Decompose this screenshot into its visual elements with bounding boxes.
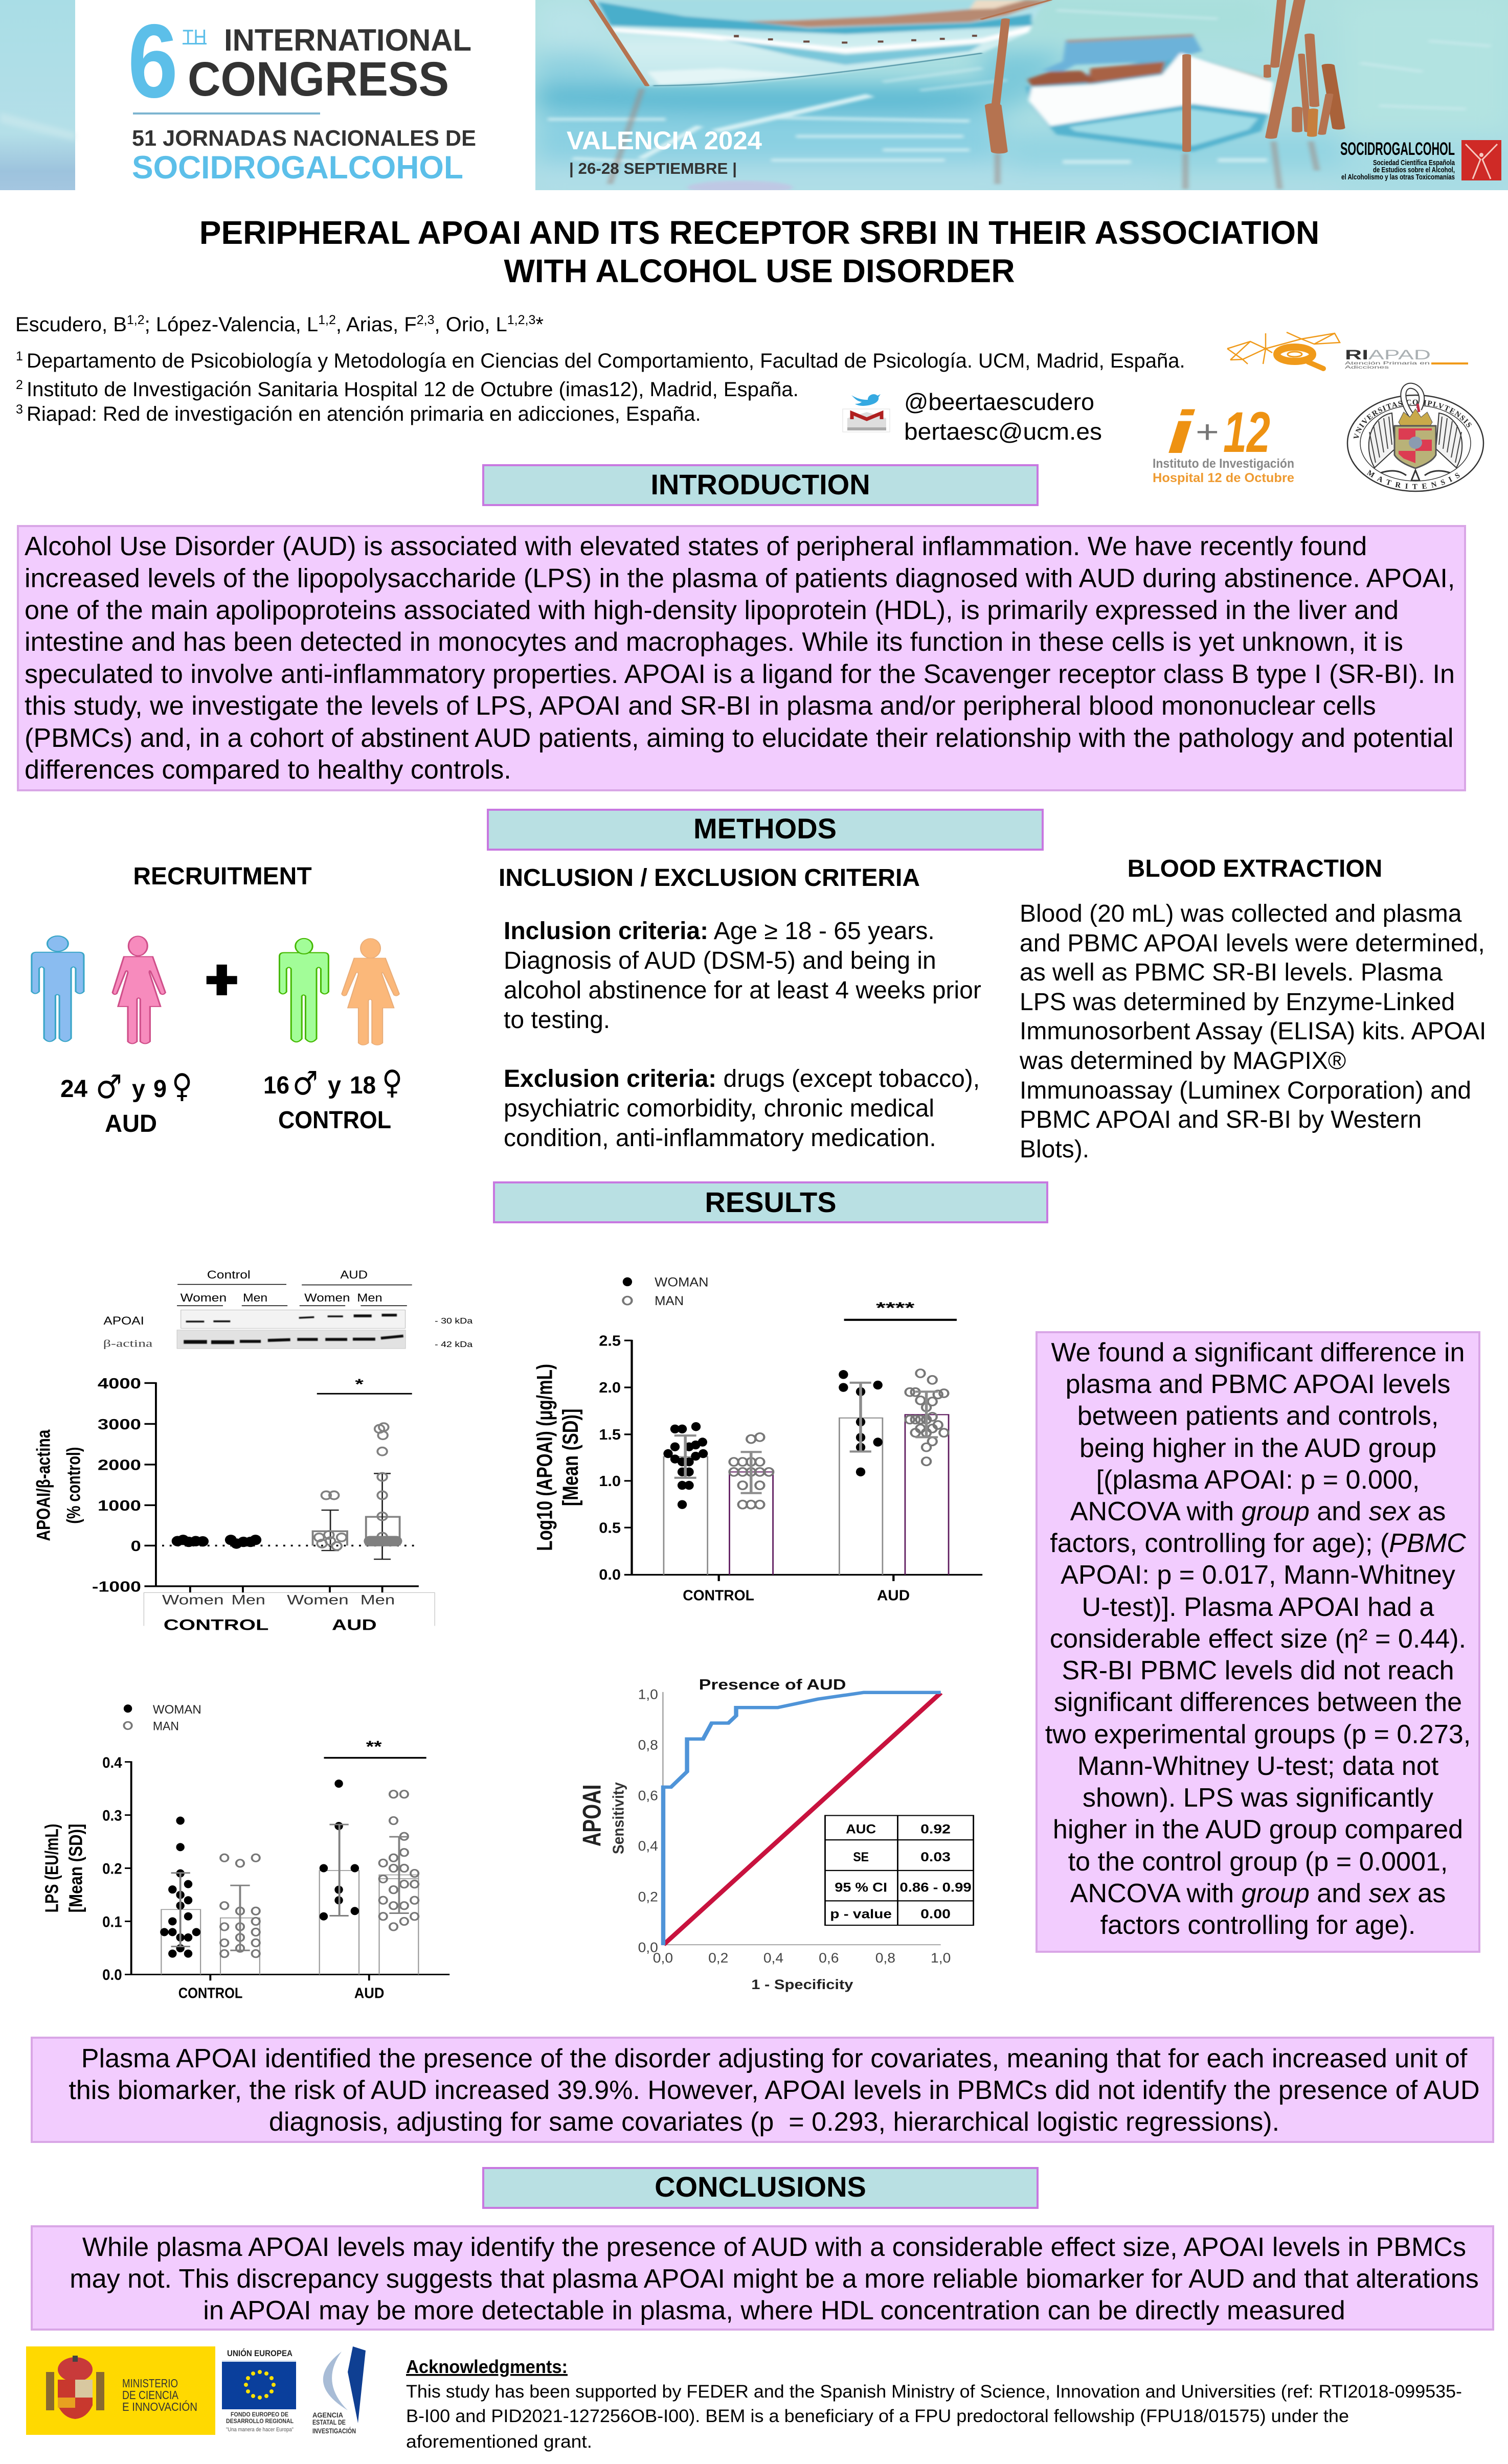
axes: 0,8 xyxy=(638,1737,658,1753)
panel: conclusions text: in APOAI may be more detectable in plasma, where HDL concentration can be directly measured xyxy=(203,2296,1345,2325)
logo: European Union: "Una manera de hacer Europa" xyxy=(226,2427,294,2433)
society logo xyxy=(1340,139,1501,181)
western blot bands: β-actina xyxy=(103,1338,153,1349)
y axis: (% control) xyxy=(63,1447,84,1524)
logo: European Union xyxy=(222,2348,296,2433)
authors: 1,2 xyxy=(127,313,145,327)
axes: 0,0 xyxy=(653,1950,673,1966)
axes: LPS (EU/mL) xyxy=(41,1824,62,1912)
panel: introduction text: increased levels of the lipopolysaccharide (LPS) in the plasma of patients diagnosed with AUD during abstinence. APOAI, xyxy=(25,563,1455,593)
contact block: @beertaescudero xyxy=(904,389,1094,415)
axes: 0,2 xyxy=(638,1889,658,1905)
exclusion text: psychiatric comorbidity, chronic medical xyxy=(504,1095,934,1122)
axes: [Mean (SD)] xyxy=(559,1409,583,1506)
legend xyxy=(623,1275,708,1308)
authors: 1,2,3 xyxy=(507,313,535,327)
ROC curve line xyxy=(663,1693,941,1945)
group labels: Men xyxy=(231,1592,265,1608)
AUD counts xyxy=(60,1067,192,1137)
control counts: 16 xyxy=(263,1072,289,1099)
panel: results text: ANCOVA with group and sex as xyxy=(1070,1497,1446,1526)
acknowledgments: aforementioned grant. xyxy=(406,2432,592,2452)
section heading: methods xyxy=(488,810,1043,850)
axes: 0,4 xyxy=(763,1950,783,1966)
affiliations: 1 xyxy=(16,349,23,363)
AUC statistics table: 95 % CI xyxy=(835,1881,887,1895)
axes: AUD xyxy=(877,1588,910,1604)
western blot bands: APOAI xyxy=(103,1314,144,1328)
water tones xyxy=(535,8,1492,177)
inclusion text: to testing. xyxy=(504,1007,610,1034)
blood extraction text: Blots). xyxy=(1020,1136,1089,1163)
authors: Escudero, B xyxy=(15,313,127,336)
blood extraction text: and PBMC APOAI levels were determined, xyxy=(1020,930,1485,957)
axes: 0.5 xyxy=(599,1520,621,1536)
contact block xyxy=(843,389,1102,445)
panel: results text: being higher in the AUD group xyxy=(1079,1433,1436,1463)
venue and date: VALENCIA 2024 xyxy=(567,126,762,155)
boat two xyxy=(1025,34,1273,152)
axes: APOAI xyxy=(577,1785,606,1846)
panel: results text: ANCOVA with group and sex as xyxy=(1070,1879,1446,1908)
axes: 0.0 xyxy=(102,1967,122,1983)
panel: results text xyxy=(1037,1332,1479,1952)
logo: i+12 xyxy=(1153,399,1294,485)
AUD counts: ♀ xyxy=(172,1067,192,1105)
y axis: APOAI/β-actina xyxy=(33,1429,54,1541)
AUD counts: 24 xyxy=(60,1076,87,1103)
data points xyxy=(663,1370,948,1509)
axes: 2.5 xyxy=(599,1333,621,1349)
logo: Spanish ministry xyxy=(26,2346,215,2435)
logo: RIAPAD: Atención Primaria en xyxy=(1345,361,1430,366)
affiliations: 3 xyxy=(16,402,23,417)
logo: RIAPAD: RI APAD xyxy=(1345,347,1431,362)
exclusion text xyxy=(504,1065,980,1152)
panel: logistic regression text xyxy=(32,2038,1493,2142)
blot column labels: Control xyxy=(207,1268,251,1282)
title: PERIPHERAL APOAI AND ITS RECEPTOR SRBI IN THEIR ASSOCIATION xyxy=(199,214,1319,251)
authors: 1,2 xyxy=(318,313,336,327)
venue and date: | 26-28 SEPTIEMBRE | xyxy=(569,159,737,177)
acknowledgments: This study has been supported by FEDER and the Spanish Ministry of Science, Innovation and Universities (ref: RTI2018-099535- xyxy=(406,2382,1462,2402)
icon: plus xyxy=(207,965,237,995)
icon: twitter xyxy=(851,394,881,406)
society logo: Sociedad Científica Española xyxy=(1373,158,1455,167)
logo: Spanish ministry: DE CIENCIA xyxy=(122,2388,179,2402)
acknowledgments xyxy=(406,2356,1462,2452)
legend: WOMAN xyxy=(655,1275,708,1290)
panel: results text: factors, controlling for age); (PBMC xyxy=(1050,1528,1466,1558)
western blot bands xyxy=(103,1310,473,1349)
control counts: ♀ xyxy=(382,1064,402,1102)
axes: 0.3 xyxy=(102,1808,122,1824)
AUD counts: y xyxy=(132,1076,145,1103)
left water strip xyxy=(0,0,75,190)
y axis xyxy=(33,1375,419,1595)
chart: ROC curve xyxy=(577,1677,974,1992)
painting of boats on water xyxy=(535,0,1508,194)
logo: state research agency: AGENCIA xyxy=(312,2411,343,2419)
blot column labels: Women xyxy=(181,1291,227,1305)
logo: Spanish ministry: E INNOVACIÓN xyxy=(122,2400,197,2413)
exclusion text: Exclusion criteria: drugs (except tobacco), xyxy=(504,1065,980,1092)
AUD counts: 9 xyxy=(153,1076,167,1103)
logo: RIAPAD xyxy=(1227,332,1468,370)
panel: results text: between patients and controls, xyxy=(1077,1401,1438,1431)
logo: European Union: FONDO EUROPEO DE xyxy=(231,2411,288,2418)
society logo: el Alcoholismo y las otras Toxicomanías xyxy=(1341,173,1455,181)
chart: western blot and APOAI/beta-actin in PBMC xyxy=(33,1268,473,1633)
section heading: conclusions xyxy=(483,2168,1038,2208)
group labels: Men xyxy=(361,1592,395,1608)
blood extraction text: Immunosorbent Assay (ELISA) kits. APOAI xyxy=(1020,1018,1486,1045)
logo: state research agency xyxy=(312,2346,366,2435)
axes: 0,8 xyxy=(875,1950,895,1966)
AUC statistics table: p - value xyxy=(830,1907,892,1922)
panel: results text: We found a significant difference in xyxy=(1051,1338,1465,1367)
plot marks xyxy=(162,1376,417,1559)
panel: introduction text: Alcohol Use Disorder (AUD) is associated with elevated states of peripheral inflammation. We have recently found xyxy=(25,532,1367,561)
bars xyxy=(161,1870,418,1974)
blot column labels: Men xyxy=(243,1291,267,1305)
logo: European Union: DESARROLLO REGIONAL xyxy=(226,2417,294,2425)
panel: results text: U-test)]. Plasma APOAI had a xyxy=(1082,1592,1434,1622)
panel: recruitment xyxy=(32,863,402,1137)
inclusion text: Diagnosis of AUD (DSM-5) and being in xyxy=(504,947,936,974)
AUC statistics table: SE xyxy=(853,1850,869,1864)
axes: 0,6 xyxy=(819,1950,839,1966)
acknowledgments: Acknowledgments: xyxy=(406,2356,568,2377)
heading: blood extraction: BLOOD EXTRACTION xyxy=(1128,855,1382,882)
panel: results text: [(plasma APOAI: p = 0.000, xyxy=(1096,1465,1420,1495)
axes: 1,0 xyxy=(638,1687,658,1702)
error bars and significance xyxy=(674,1299,957,1493)
y axis: 0 xyxy=(131,1538,141,1555)
panel: logistic regression text: Plasma APOAI identified the presence of the disorder adjusting for covariates, meaning that for each increased unit of xyxy=(81,2044,1468,2073)
legend: WOMAN xyxy=(153,1702,201,1717)
panel: inclusion and exclusion criteria xyxy=(499,864,981,1152)
legend xyxy=(124,1702,201,1733)
axes: Log10 (APOAI) (μg/mL) xyxy=(533,1364,557,1551)
panel: logistic regression text: this biomarker, the risk of AUD increased 39.9%. However, APOAI levels in PBMCs did not identify the presence of AUD xyxy=(69,2075,1480,2105)
panel: conclusions text: may not. This discrepancy suggests that plasma APOAI might be a more reliable biomarker for AUD and that alterations xyxy=(70,2264,1479,2294)
western blot bands: - 42 kDa xyxy=(435,1340,473,1349)
blot column labels: AUD xyxy=(340,1268,368,1282)
logo: RIAPAD: Adicciones xyxy=(1345,365,1389,370)
control counts: y xyxy=(328,1072,341,1099)
western blot bands: - 30 kDa xyxy=(435,1316,473,1326)
affiliations xyxy=(16,349,1185,425)
panel: conclusions text: While plasma APOAI levels may identify the presence of AUD with a considerable effect size, APOAI levels in PBMCs xyxy=(82,2232,1466,2262)
logo: university seal xyxy=(1347,382,1484,492)
logo: state research agency: ESTATAL DE xyxy=(312,2418,346,2426)
panel: introduction text xyxy=(18,526,1465,790)
panel: introduction text: (PBMCs) and, in a cohort of abstinent AUD patients, aiming to elucidate their relationship with the pathology and potential xyxy=(25,723,1453,753)
section heading: introduction: INTRODUCTION xyxy=(650,468,870,500)
logo: university seal: MATRITENSIS xyxy=(1366,470,1459,489)
panel: results text: APOAI: p = 0.017, Mann-Whitney xyxy=(1061,1560,1455,1590)
panel: results text: considerable effect size (η² = 0.44). xyxy=(1050,1624,1466,1654)
control counts: ♂ xyxy=(292,1065,318,1103)
axes: AUD xyxy=(354,1986,384,2002)
blood extraction text: was determined by MAGPIX® xyxy=(1019,1047,1346,1075)
panel: results text: plasma and PBMC APOAI levels xyxy=(1066,1370,1450,1399)
inclusion text: alcohol abstinence for at least 4 weeks prior xyxy=(504,977,981,1004)
affiliations: 2 xyxy=(16,378,23,392)
control counts xyxy=(263,1064,402,1134)
axes: 0.2 xyxy=(102,1861,122,1877)
panel: conclusions text xyxy=(32,2226,1493,2330)
oar reflections xyxy=(610,88,1317,189)
inclusion text xyxy=(504,918,981,1034)
error bars and significance: **** xyxy=(876,1299,914,1316)
blood extraction text: Immunoassay (Luminex Corporation) and xyxy=(1020,1077,1471,1104)
chart title: Presence of AUD xyxy=(699,1677,846,1693)
logo: Spanish ministry: MINISTERIO xyxy=(122,2377,178,2390)
AUC statistics table: 0.00 xyxy=(920,1907,951,1922)
icon: control man xyxy=(279,939,328,1042)
panel: results text: shown). LPS was significantly xyxy=(1083,1783,1433,1813)
AUC statistics table: 0.92 xyxy=(920,1822,951,1837)
heading: criteria: INCLUSION / EXCLUSION CRITERIA xyxy=(499,864,920,892)
logo: i+12: + xyxy=(1196,415,1219,450)
chart: plasma APOAI xyxy=(533,1275,982,1604)
axes xyxy=(41,1754,449,2002)
y axis: 2000 xyxy=(98,1456,141,1473)
panel: introduction text: differences compared to healthy controls. xyxy=(25,755,511,785)
panel: blood extraction xyxy=(1019,855,1486,1163)
panel: introduction text: this study, we investigate the levels of LPS, APOAI and SR-BI in plasma and/or peripheral blood mononuclear cells xyxy=(25,691,1376,721)
bars xyxy=(664,1414,949,1575)
logo: university seal: VNIVERSITAS COMPLVTENSIS xyxy=(1353,400,1472,439)
y axis: -1000 xyxy=(92,1578,141,1595)
blot column labels: Women xyxy=(304,1291,350,1305)
authors: ; López-Valencia, L xyxy=(145,313,318,336)
figures and groups xyxy=(32,936,402,1137)
AUC statistics table xyxy=(825,1815,974,1925)
axes: 1 - Specificity xyxy=(751,1977,853,1992)
axes: 0,6 xyxy=(638,1788,658,1804)
axes: 0,0 xyxy=(638,1940,658,1955)
section heading: methods: METHODS xyxy=(693,812,837,845)
blot column labels xyxy=(177,1268,412,1306)
section heading: introduction xyxy=(483,465,1038,505)
axes: [Mean (SD)] xyxy=(65,1824,86,1912)
error bars and significance xyxy=(171,1738,426,1950)
blood extraction text: as well as PBMC SR-BI levels. Plasma xyxy=(1020,959,1443,986)
y axis: 4000 xyxy=(98,1375,141,1392)
y axis: 1000 xyxy=(98,1497,141,1514)
heading: recruitment: RECRUITMENT xyxy=(133,863,312,890)
chart: LPS xyxy=(41,1702,449,2002)
group labels xyxy=(144,1592,435,1633)
axes: 1,0 xyxy=(931,1950,951,1966)
congress logo: INTERNATIONAL xyxy=(224,23,471,57)
legend: MAN xyxy=(153,1719,179,1733)
axes: 0,4 xyxy=(638,1838,658,1854)
title: WITH ALCOHOL USE DISORDER xyxy=(504,253,1015,289)
affiliations: Instituto de Investigación Sanitaria Hospital 12 de Octubre (imas12), Madrid, España. xyxy=(27,378,799,401)
axes: 0.1 xyxy=(102,1914,122,1930)
oars xyxy=(591,0,1339,151)
axes: 1.5 xyxy=(599,1427,621,1443)
title xyxy=(199,214,1319,289)
authors: 2,3 xyxy=(417,313,434,327)
panel: results text: SR-BI PBMC levels did not reach xyxy=(1062,1656,1454,1685)
data points xyxy=(160,1779,418,1958)
blood extraction text xyxy=(1019,900,1486,1163)
group labels: CONTROL xyxy=(164,1616,268,1633)
contact block: bertaesc@ucm.es xyxy=(904,418,1102,445)
panel: results text: two experimental groups (p = 0.273, xyxy=(1045,1720,1471,1749)
AUD counts: ♂ xyxy=(96,1068,122,1106)
icon: mail xyxy=(843,409,890,432)
blood extraction text: LPS was determined by Enzyme-Linked xyxy=(1020,989,1455,1016)
AUD counts: AUD xyxy=(105,1110,157,1137)
error bars and significance: ** xyxy=(366,1738,382,1755)
logo: i+12: Instituto de Investigación xyxy=(1153,457,1294,471)
section heading: results xyxy=(494,1182,1047,1222)
boat one xyxy=(588,0,1050,86)
logo: i+12: Hospital 12 de Octubre xyxy=(1153,471,1294,485)
control counts: CONTROL xyxy=(278,1107,391,1134)
logo: i+12: 12 xyxy=(1223,400,1270,464)
congress logo xyxy=(128,3,476,186)
header banner xyxy=(0,0,1508,194)
axes: CONTROL xyxy=(178,1986,242,2002)
panel: results text: factors controlling for age). xyxy=(1100,1910,1415,1940)
logo: i+12: i xyxy=(1167,399,1195,466)
y axis: 3000 xyxy=(98,1416,141,1433)
congress logo: SOCIDROGALCOHOL xyxy=(132,150,463,186)
icon: control woman xyxy=(342,939,399,1045)
axes: 0.0 xyxy=(599,1567,621,1583)
society logo: de Estudios sobre el Alcohol, xyxy=(1373,166,1455,174)
panel: results text: higher in the AUD group compared xyxy=(1053,1815,1463,1844)
legend: MAN xyxy=(655,1294,684,1308)
AUC statistics table: 0.86 - 0.99 xyxy=(899,1881,972,1895)
axes: Sensitivity xyxy=(610,1782,627,1854)
axes xyxy=(577,1687,951,1992)
acknowledgments: B-I00 and PID2021-127256OB-I00). BEM is a beneficiary of a FPU predoctoral fellowship (FPU18/01575) under the xyxy=(406,2406,1349,2426)
congress logo: TH xyxy=(183,25,207,49)
panel: introduction text: speculated to involve anti-inflammatory properties. APOAI is a ligand for the Scavenger receptor class B type I (SR-BI). In xyxy=(25,659,1455,689)
axes: CONTROL xyxy=(683,1588,754,1604)
section heading: conclusions: CONCLUSIONS xyxy=(655,2171,866,2203)
axes xyxy=(533,1333,982,1604)
blood extraction text: Blood (20 mL) was collected and plasma xyxy=(1020,900,1462,927)
icon: AUD woman xyxy=(112,936,165,1043)
axes: 0,2 xyxy=(708,1950,728,1966)
congress logo: 6 xyxy=(128,3,178,120)
AUC statistics table: 0.03 xyxy=(920,1850,951,1864)
section heading: results: RESULTS xyxy=(705,1186,837,1218)
diagonal reference line xyxy=(664,1693,941,1945)
authors: , Arias, F xyxy=(336,313,417,336)
blood extraction text: PBMC APOAI and SR-BI by Western xyxy=(1020,1106,1422,1133)
AUC statistics table: AUC xyxy=(846,1822,876,1837)
panel: introduction text: one of the main apolipoproteins associated with high-density lipoprotein (HDL), is primarily expressed in the liver and xyxy=(25,596,1399,625)
authors: * xyxy=(535,313,544,336)
authors: , Orio, L xyxy=(434,313,507,336)
icon: AUD man xyxy=(32,936,84,1041)
logo: state research agency: INVESTIGACIÓN xyxy=(312,2426,356,2435)
affiliations: Riapad: Red de investigación en atención primaria en adicciones, España. xyxy=(27,403,701,425)
panel: results text: significant differences between the xyxy=(1054,1687,1462,1717)
group labels: Women xyxy=(162,1592,224,1608)
water streaks xyxy=(548,10,1491,162)
axes: 1.0 xyxy=(599,1473,621,1490)
venue and date xyxy=(567,126,762,177)
panel: results text: to the control group (p = 0.0001, xyxy=(1068,1847,1448,1877)
affiliations: Departamento de Psicobiología y Metodología en Ciencias del Comportamiento, Facultad de Psicología. UCM, Madrid, España. xyxy=(27,350,1185,372)
inclusion text: Inclusion criteria: Age ≥ 18 - 65 years. xyxy=(504,918,935,945)
axes: 2.0 xyxy=(599,1380,621,1396)
panel: introduction text: intestine and has been detected in monocytes and macrophages. While its function in these cells is yet unknown, it is xyxy=(25,627,1403,657)
axes: 0.4 xyxy=(102,1754,122,1771)
congress logo: CONGRESS xyxy=(188,52,449,106)
panel: logistic regression text: diagnosis, adjusting for same covariates (p = 0.293, hierarchical logistic regressions). xyxy=(269,2107,1279,2137)
group labels: Women xyxy=(287,1592,349,1608)
group labels: AUD xyxy=(332,1616,377,1633)
plot marks: * xyxy=(355,1376,364,1393)
panel: results text: Mann-Whitney U-test; data not xyxy=(1077,1751,1439,1781)
control counts: 18 xyxy=(350,1072,376,1099)
blot column labels: Men xyxy=(357,1291,382,1305)
exclusion text: condition, anti-inflammatory medication. xyxy=(504,1125,936,1152)
logo: European Union: UNIÓN EUROPEA xyxy=(227,2348,292,2358)
congress logo: 51 JORNADAS NACIONALES DE xyxy=(132,126,476,151)
